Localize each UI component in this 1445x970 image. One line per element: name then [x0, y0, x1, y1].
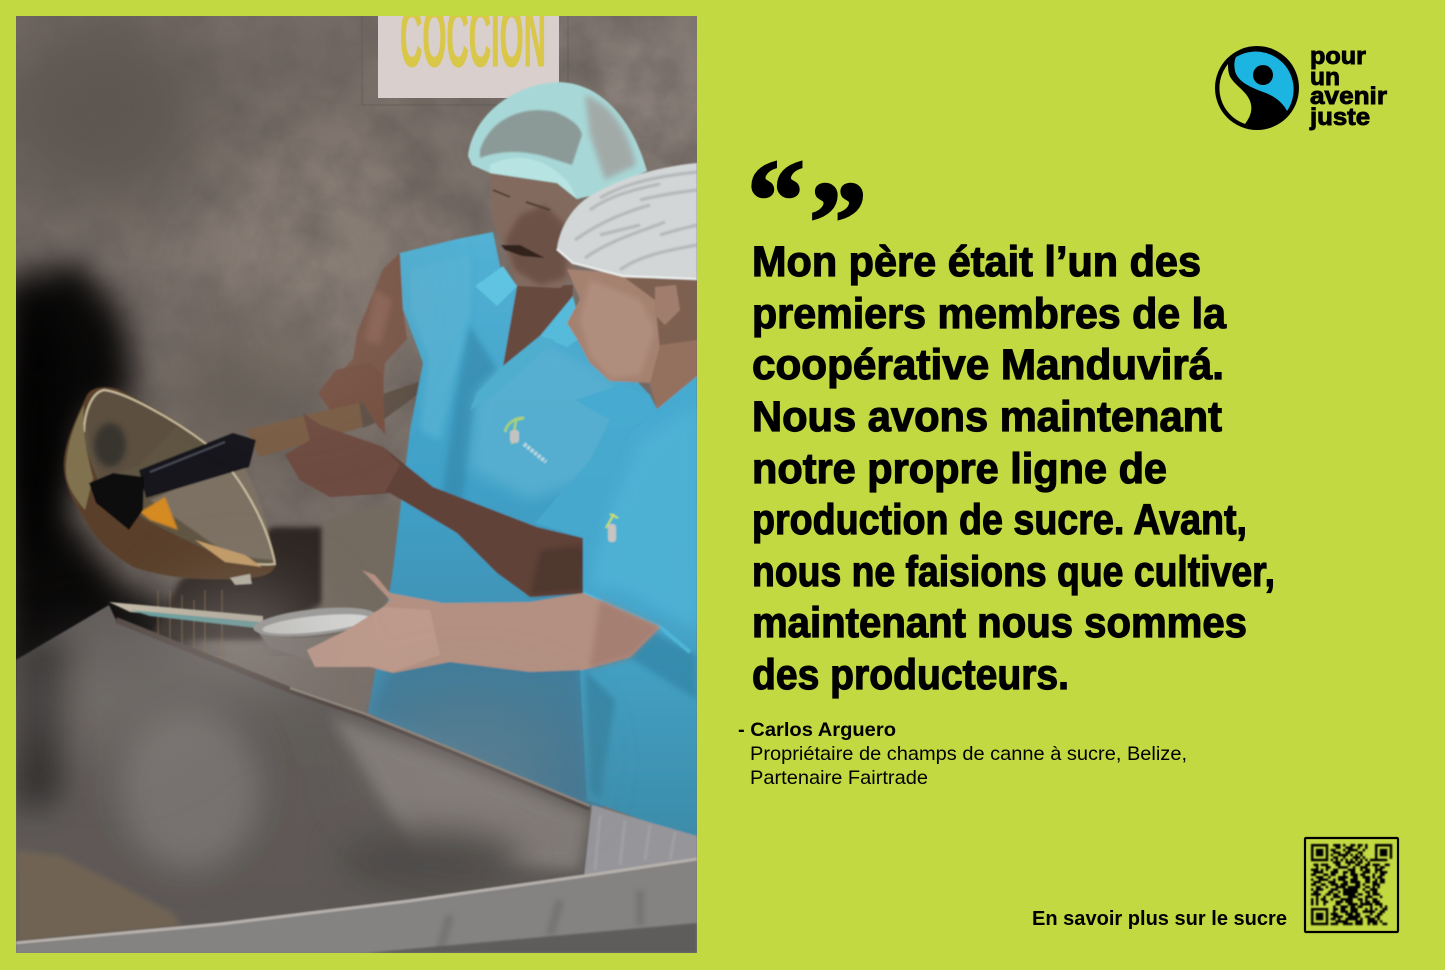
man: shirt — [368, 232, 650, 820]
man: neck — [503, 285, 573, 366]
call to action: En savoir plus sur le sucre — [1032, 908, 1287, 930]
quotation marks: “ — [747, 137, 805, 265]
steam — [16, 564, 568, 792]
wall shading — [0, 10, 720, 460]
quotation marks: ” — [809, 159, 867, 287]
metal bowl — [109, 602, 378, 662]
wall to right of furnace — [320, 504, 397, 606]
photo: workers pouring sugar syrup in steam — [0, 0, 720, 953]
man: forearm and hand — [342, 448, 584, 598]
wall mottling — [16, 16, 697, 587]
quote text: Mon père était l’un des — [752, 238, 1201, 286]
man: shirt emblem — [505, 418, 546, 462]
man: hand on handle front — [318, 362, 385, 435]
sign frame shadow — [362, 10, 568, 105]
sign — [378, 16, 559, 98]
ladle handle — [89, 402, 363, 530]
logo tagline: un — [1310, 64, 1340, 91]
stick end behind hand — [359, 381, 421, 428]
logo tagline: pour — [1310, 43, 1366, 70]
woman: hair net — [557, 163, 697, 279]
quote text: maintenant nous sommes — [752, 599, 1247, 647]
dark furnace area — [0, 262, 190, 700]
woman: shirt — [535, 376, 697, 840]
quote text: Nous avons maintenant — [752, 393, 1222, 441]
quote text — [752, 238, 1275, 699]
man: hair net — [468, 82, 647, 199]
syrup drips — [156, 590, 224, 648]
logo tagline: juste — [1309, 104, 1370, 131]
dark opening behind pan — [150, 527, 323, 640]
quote text: premiers membres de la — [752, 290, 1227, 338]
quote text: notre propre ligne de — [752, 445, 1167, 493]
vat rim — [116, 620, 590, 808]
woman: shirt emblem — [606, 514, 618, 528]
quote text: nous ne faisions que cultiver, — [752, 548, 1275, 596]
logo tagline — [1309, 43, 1387, 131]
quote text: coopérative Manduvirá. — [752, 341, 1224, 389]
woman: face — [566, 268, 660, 384]
woman: sleeve hem — [583, 593, 690, 652]
attribution: Propriétaire de champs de canne à sucre, Belize, — [750, 743, 1187, 765]
quote text: production de sucre. Avant, — [752, 496, 1247, 544]
quote text: des producteurs. — [752, 651, 1069, 699]
metal vat — [16, 605, 697, 953]
man: collar — [475, 266, 517, 306]
logo tagline: avenir — [1310, 83, 1387, 110]
woman: arms and hands — [362, 570, 660, 674]
man: face — [490, 173, 580, 288]
logo: Fairtrade mark — [1215, 46, 1299, 130]
man: upper arm — [345, 254, 408, 429]
attribution: Partenaire Fairtrade — [750, 767, 928, 789]
attribution: - Carlos Arguero — [738, 719, 896, 741]
attribution — [738, 719, 1187, 789]
quotation marks — [747, 137, 867, 287]
large pan — [64, 387, 276, 585]
QR code — [1305, 838, 1398, 932]
syrup liquid — [16, 850, 182, 943]
